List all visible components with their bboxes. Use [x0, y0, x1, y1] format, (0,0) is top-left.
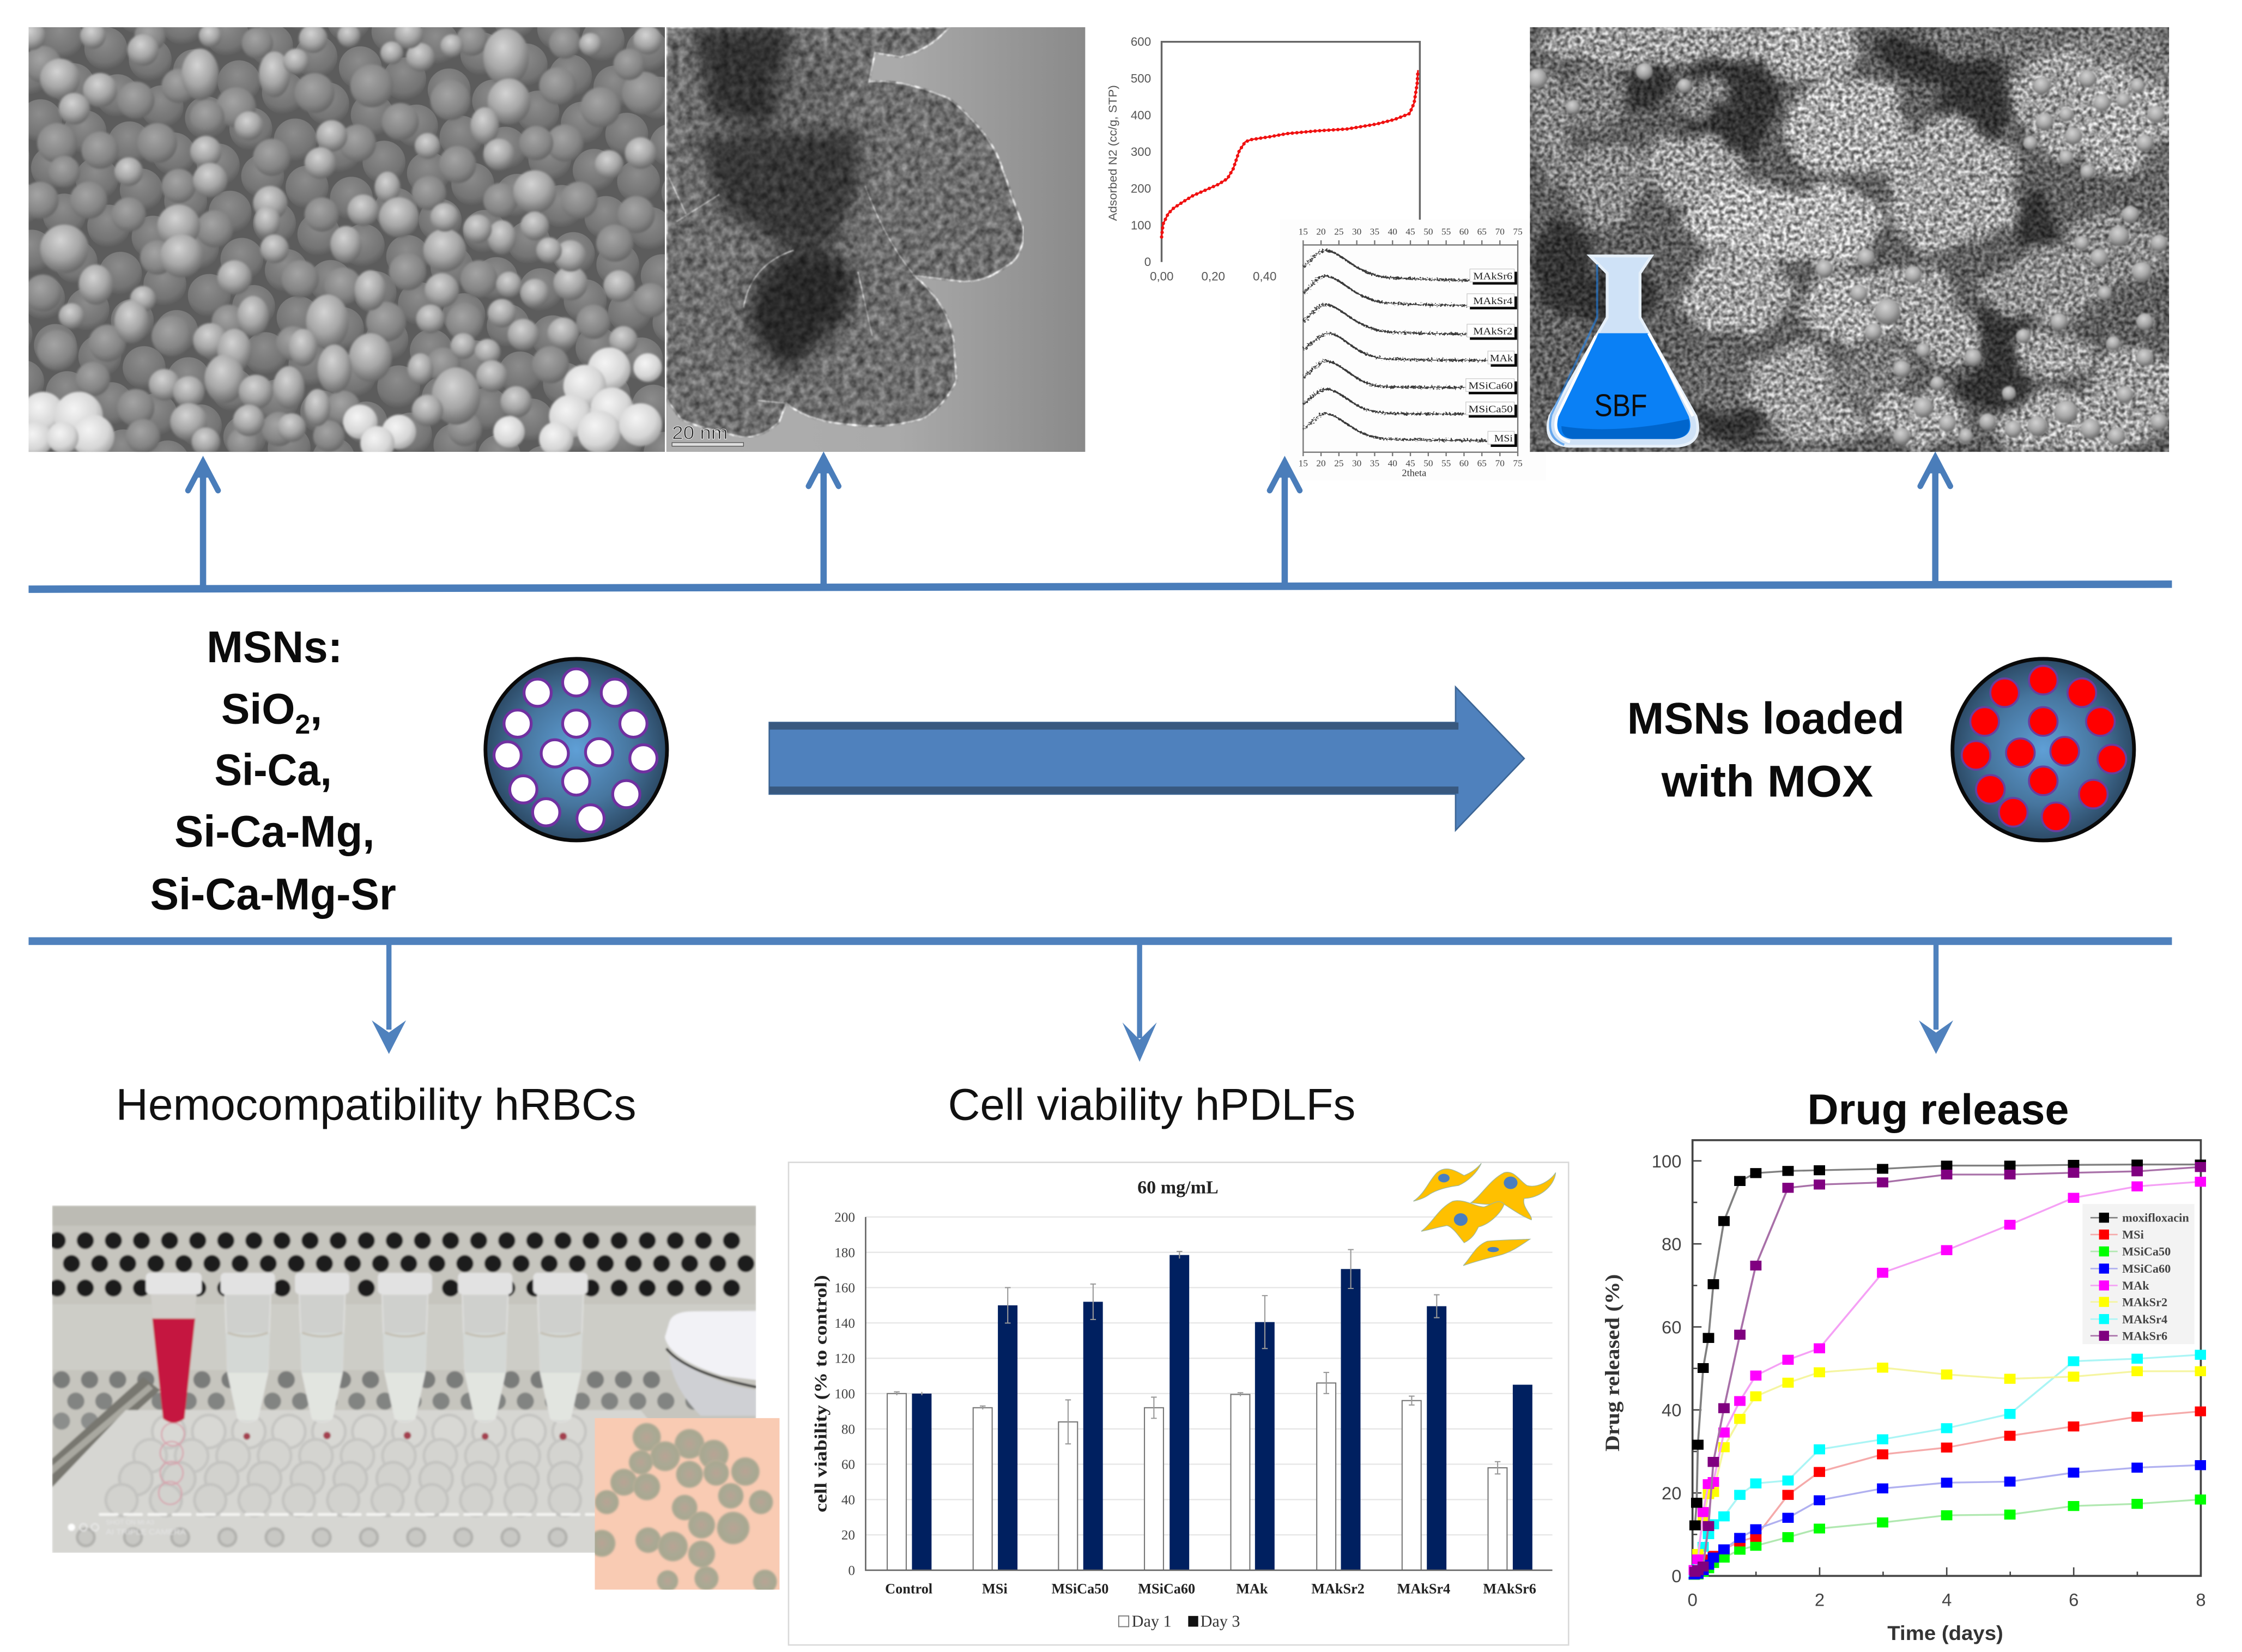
XRD bottom axis labels: 65	[1477, 458, 1487, 468]
XRD sample labels: MAkSr4	[1473, 295, 1512, 306]
chart legend: MSiCa60	[2122, 1262, 2171, 1275]
x-axis tick labels: 0	[1688, 1589, 1698, 1609]
panel: hemolysis tube photograph	[52, 1206, 758, 1553]
day 1 bars	[887, 1383, 1507, 1570]
particle mass with dark regions	[666, 27, 1024, 438]
chart y-axis tick labels: 200	[834, 1210, 855, 1225]
camera watermark	[68, 1518, 186, 1536]
XRD top axis labels: 50	[1423, 226, 1433, 237]
XRD top axis labels: 40	[1388, 226, 1397, 237]
XRD bottom axis labels: 20	[1316, 458, 1326, 468]
arrow: down to drug release	[1919, 944, 1953, 1054]
XRD bottom axis labels	[1299, 458, 1523, 468]
XRD sample labels: MSiCa50	[1469, 403, 1513, 414]
XRD sample labels: MAkSr2	[1473, 326, 1512, 337]
XRD bottom axis labels: 75	[1513, 458, 1523, 468]
isotherm y tick labels: 0	[1144, 255, 1151, 269]
chart title: 60 mg/mL	[1137, 1178, 1219, 1198]
XRD top axis labels: 15	[1299, 226, 1308, 237]
scale bar label	[672, 423, 743, 446]
clear test tubes	[221, 1273, 587, 1422]
XRD bottom axis labels: 30	[1352, 458, 1361, 468]
chart category labels: MAkSr4	[1397, 1581, 1450, 1597]
text block: MSN compositions: ,	[310, 685, 322, 733]
XRD top axis labels: 60	[1459, 226, 1469, 237]
chart y-axis tick labels: 40	[841, 1493, 855, 1508]
icon: drug-loaded nanoparticle	[1953, 659, 2134, 840]
y-axis title: Drug released (%)	[1601, 1274, 1623, 1451]
isotherm axes	[1162, 42, 1420, 262]
x-axis tick labels: 2	[1815, 1589, 1825, 1609]
chart axes	[865, 1217, 1553, 1570]
XRD top axis labels	[1299, 226, 1523, 237]
chart y-axis tick labels: 160	[834, 1281, 855, 1296]
y-axis tick labels: 0	[1671, 1566, 1681, 1586]
camera watermark: AI TRIPLE CAMERA	[106, 1528, 186, 1536]
chart legend: MAk	[2122, 1279, 2149, 1292]
XRD top axis labels: 20	[1316, 226, 1326, 237]
chart y-axis tick labels: 140	[834, 1316, 855, 1331]
error bars	[894, 1250, 1500, 1474]
XRD bottom axis labels: 50	[1423, 458, 1433, 468]
chart legend	[1119, 1612, 1240, 1631]
chart legend: MSiCa50	[2122, 1245, 2171, 1258]
white instrument	[665, 1311, 756, 1380]
icons: fibroblast cells	[1414, 1163, 1556, 1266]
chart y-axis tick labels: 100	[834, 1387, 855, 1402]
blood pellets	[244, 1432, 567, 1440]
XRD bottom axis labels: 35	[1370, 458, 1379, 468]
XRD frame	[1303, 240, 1518, 456]
y-axis tick labels: 20	[1662, 1483, 1681, 1503]
chart category labels: MSi	[982, 1581, 1008, 1597]
small spherical deposits	[1527, 63, 2168, 445]
day 3 bars	[912, 1255, 1532, 1570]
arrow: up to TEM panel	[809, 454, 839, 586]
chart legend: Day 1	[1132, 1612, 1172, 1631]
well plate red ring marks	[159, 1423, 184, 1504]
isotherm y axis title: Adsorbed N2 (cc/g, STP)	[1107, 85, 1119, 221]
XRD sample labels: MSi	[1494, 433, 1513, 444]
isotherm x tick labels: 0,00	[1150, 269, 1173, 283]
XRD bottom axis labels: 55	[1441, 458, 1451, 468]
arrow: down to hemocompatibility	[372, 944, 406, 1054]
arrow: up to SBF SEM panel	[1920, 454, 1950, 584]
data series	[1694, 1165, 2201, 1575]
XRD top axis labels: 65	[1477, 226, 1487, 237]
panel: SEM micrograph after SBF	[1530, 27, 2169, 452]
y-axis tick labels: 60	[1662, 1317, 1681, 1337]
text block: MSN compositions: 2	[295, 709, 310, 740]
chart category labels: MAkSr6	[1483, 1581, 1536, 1597]
red positive control tube	[146, 1273, 202, 1423]
chart y-axis tick labels	[834, 1210, 855, 1578]
panel: XRD patterns inset	[1280, 220, 1546, 481]
chart category labels: MAk	[1236, 1581, 1268, 1597]
x-axis tick labels	[1688, 1589, 2206, 1609]
flask liquid	[1558, 333, 1690, 439]
biosafety cabinet rod	[52, 1377, 160, 1487]
chart category labels: MSiCa50	[1052, 1581, 1108, 1597]
top divider line	[28, 584, 2172, 589]
chart legend: moxifloxacin	[2122, 1211, 2189, 1225]
heading: hemocompatibility: Hemocompatibility hRBCs	[116, 1080, 637, 1129]
arrow: main process arrow	[769, 687, 1524, 830]
text block: MSN compositions: Si-Ca-Mg,	[174, 807, 374, 856]
isotherm y tick labels: 100	[1131, 219, 1151, 232]
isotherm curve	[1162, 70, 1418, 237]
text block: MSNs loaded with MOX: with MOX	[1661, 757, 1873, 806]
flask label: SBF	[1594, 389, 1647, 423]
panel: drug release line chart	[1601, 1140, 2206, 1644]
panel: TEM micrograph of nanoparticles	[666, 27, 1085, 452]
chart legend: MAkSr2	[2122, 1295, 2167, 1309]
panel: cell viability bar chart	[789, 1163, 1568, 1645]
isotherm y tick labels: 600	[1131, 35, 1151, 49]
text block: MSN compositions: Si-Ca,	[215, 745, 332, 795]
y-axis tick labels: 40	[1662, 1400, 1681, 1420]
chart category labels	[885, 1581, 1536, 1597]
XRD top axis labels: 55	[1441, 226, 1451, 237]
isotherm y tick labels: 400	[1131, 108, 1151, 122]
chart y-axis tick labels: 0	[848, 1564, 855, 1578]
chart y-axis tick labels: 20	[841, 1528, 855, 1543]
XRD bottom axis labels: 40	[1388, 458, 1397, 468]
mineralized clusters	[1473, 0, 2231, 515]
XRD top axis labels: 45	[1405, 226, 1415, 237]
x-axis tick labels: 6	[2069, 1589, 2079, 1609]
XRD sample labels: MAkSr6	[1473, 270, 1512, 281]
XRD bottom axis labels: 60	[1459, 458, 1469, 468]
XRD bottom axis labels: 45	[1405, 458, 1415, 468]
panel: red blood cell micrograph	[589, 1418, 779, 1594]
text block: MSNs loaded with MOX	[1627, 694, 1905, 806]
chart ticks	[1693, 1161, 2201, 1576]
XRD top axis labels: 35	[1370, 226, 1379, 237]
XRD x axis title: 2theta	[1402, 468, 1426, 479]
isotherm x tick labels: 0,40	[1253, 269, 1276, 283]
chart y-axis tick labels: 80	[841, 1422, 855, 1437]
isotherm x tick labels: 0,20	[1202, 269, 1225, 283]
text block: MSN compositions: Si-Ca-Mg-Sr	[150, 870, 396, 919]
chart gridlines	[865, 1217, 1553, 1535]
arrow: down to cell viability	[1123, 944, 1157, 1062]
XRD top axis labels: 30	[1352, 226, 1361, 237]
icon: SBF flask	[1548, 256, 1698, 446]
text block: MSN compositions: MSNs:	[207, 622, 342, 672]
XRD sample labels: MSiCa60	[1469, 380, 1513, 391]
heading: drug release: Drug release	[1807, 1085, 2069, 1133]
XRD sample labels: MAk	[1490, 353, 1513, 364]
y-axis tick labels: 80	[1662, 1234, 1681, 1254]
isotherm y tick labels: 200	[1131, 181, 1151, 195]
isotherm x tick labels	[1150, 269, 1276, 283]
chart category labels: MSiCa60	[1138, 1581, 1195, 1597]
bottom divider line	[28, 937, 2172, 945]
x-axis tick labels: 8	[2196, 1589, 2206, 1609]
chart legend: MAkSr4	[2122, 1312, 2167, 1326]
chart legend: Day 3	[1201, 1612, 1240, 1631]
text block: MSN compositions: SiO	[221, 685, 295, 733]
chart category labels: MAkSr2	[1311, 1581, 1365, 1597]
text block: MSN compositions	[150, 622, 396, 919]
arrow: up to SEM panel	[188, 458, 218, 588]
XRD top axis labels: 25	[1334, 226, 1344, 237]
arrow: up to characterization charts	[1270, 459, 1300, 585]
chart y-axis title: cell viability (% to control)	[811, 1275, 831, 1512]
well plate	[52, 1410, 758, 1553]
XRD bottom axis labels: 25	[1334, 458, 1344, 468]
text block: MSNs loaded with MOX: MSNs loaded	[1627, 694, 1905, 743]
panel: SEM micrograph of MSNs	[17, 20, 668, 461]
scale bar label: 20 nm	[672, 423, 728, 444]
plate wells	[86, 1431, 601, 1538]
x-axis title: Time (days)	[1887, 1622, 2003, 1644]
chart y-axis tick labels: 60	[841, 1457, 855, 1472]
chart y-axis tick labels: 180	[834, 1245, 855, 1260]
chart legend	[2090, 1211, 2189, 1342]
XRD sample labels	[1466, 269, 1517, 447]
y-axis tick labels: 100	[1652, 1151, 1682, 1171]
flask glass	[1548, 256, 1698, 446]
x-axis tick labels: 4	[1942, 1589, 1952, 1609]
chart legend: MAkSr6	[2122, 1329, 2167, 1342]
y-axis tick labels	[1652, 1151, 1682, 1586]
icon: empty mesoporous nanoparticle	[486, 659, 667, 840]
isotherm y tick labels	[1131, 35, 1151, 269]
chart y-axis tick labels: 120	[834, 1352, 855, 1366]
XRD bottom axis labels: 70	[1495, 458, 1505, 468]
camera watermark: SHOT ON MI A3	[106, 1518, 154, 1526]
heading: cell viability: Cell viability hPDLFs	[948, 1080, 1355, 1129]
panel: N2 adsorption isotherm chart	[1107, 35, 1420, 283]
XRD bottom axis labels: 15	[1299, 458, 1308, 468]
isotherm y tick labels: 300	[1131, 145, 1151, 159]
XRD top axis labels: 75	[1513, 226, 1523, 237]
XRD top axis labels: 70	[1495, 226, 1505, 237]
isotherm y tick labels: 500	[1131, 71, 1151, 85]
legend background	[2082, 1204, 2195, 1344]
chart legend: MSi	[2122, 1228, 2144, 1242]
chart category labels: Control	[885, 1581, 932, 1597]
XRD traces	[1303, 250, 1487, 440]
